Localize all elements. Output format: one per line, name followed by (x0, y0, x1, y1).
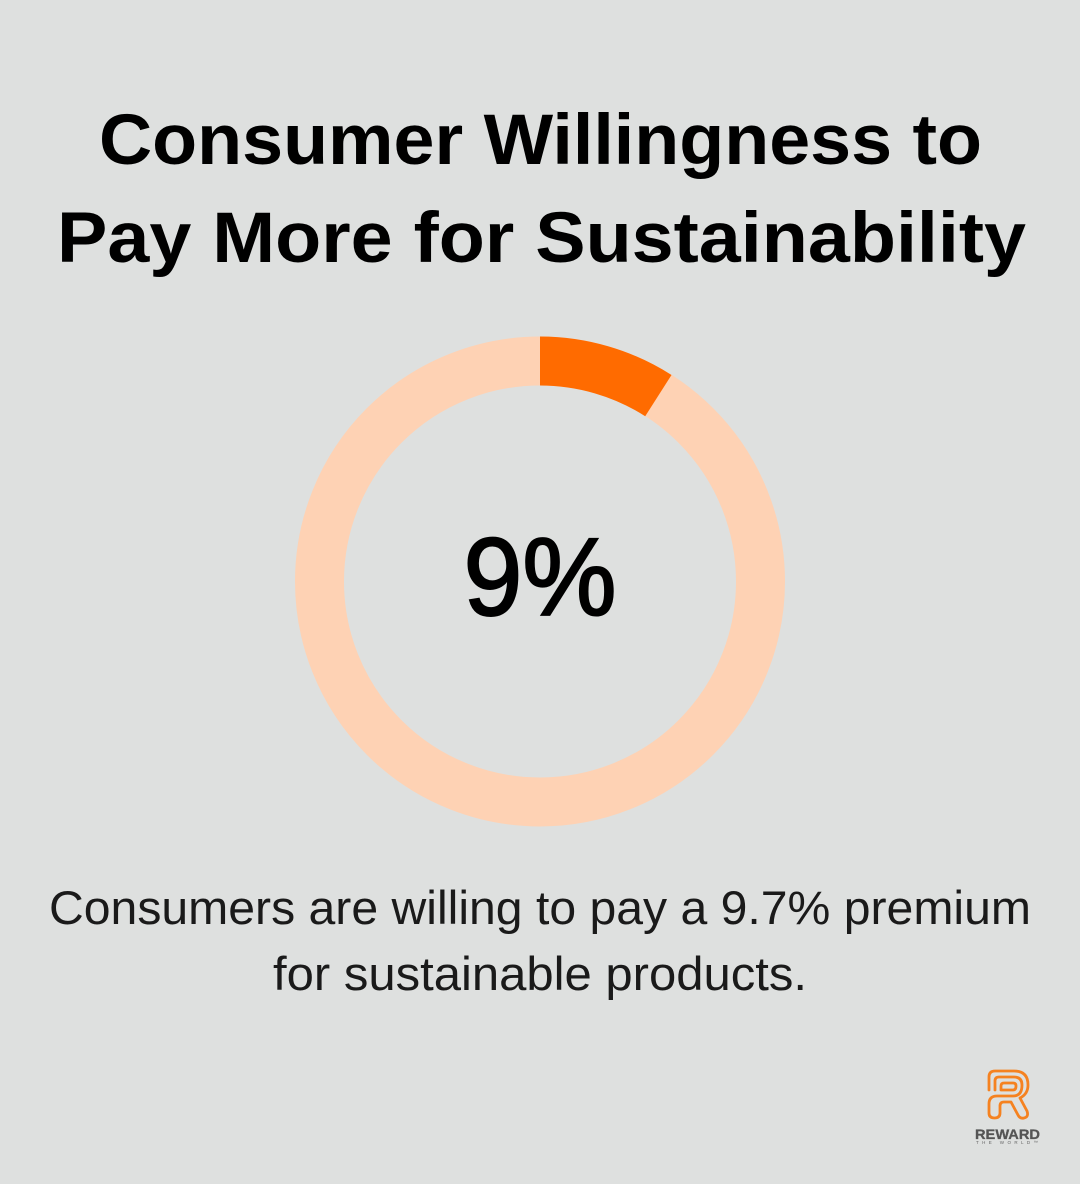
donut chart: 9% (320, 336, 760, 802)
description text: for sustainable products. (273, 947, 807, 1000)
donut value: 9% (464, 516, 616, 639)
logo tagline: THE WORLD™ (976, 1140, 1038, 1145)
title: Consumer Willingness to (99, 101, 982, 180)
logo: Reward the World (975, 1071, 1040, 1145)
description text: Consumers are willing to pay a 9.7% premium (49, 881, 1031, 934)
title (57, 101, 1027, 278)
donut highlighted segment (540, 336, 672, 416)
logo wordmark: REWARD (975, 1126, 1040, 1142)
description text (49, 881, 1031, 1000)
title: Pay More for Sustainability (57, 199, 1027, 278)
icon: R mark (989, 1071, 1028, 1118)
donut track (320, 361, 760, 802)
